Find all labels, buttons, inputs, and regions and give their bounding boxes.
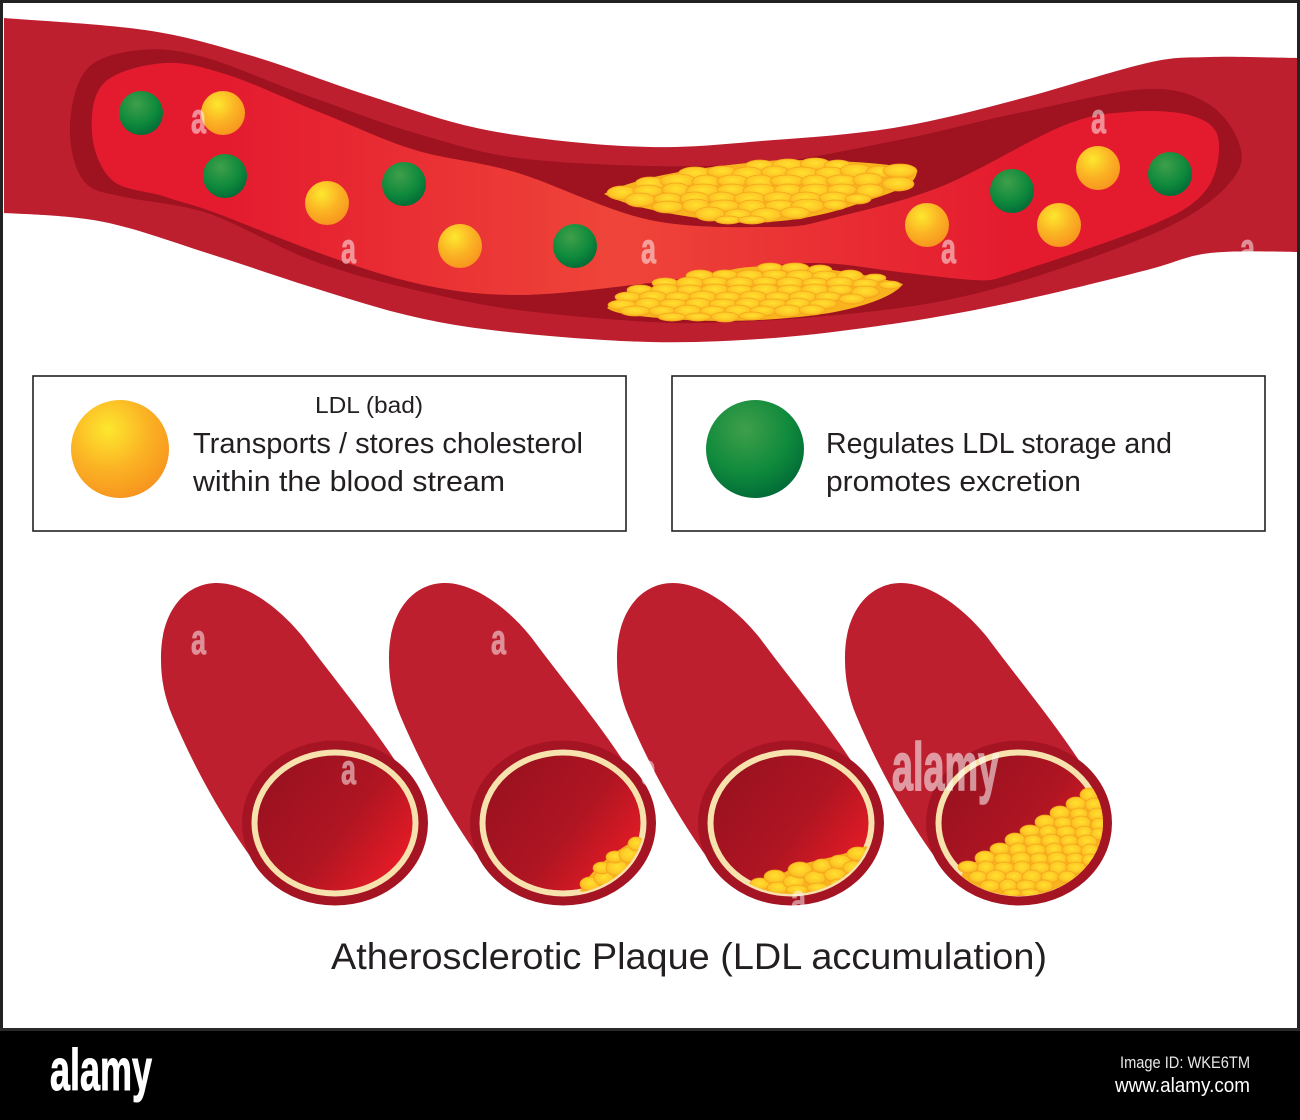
icon: LDL sphere — [71, 400, 169, 498]
watermark letters: a — [341, 225, 357, 273]
watermark letters: a — [791, 876, 807, 924]
watermark letters — [191, 95, 1256, 924]
artery outer wall — [4, 18, 1297, 342]
watermark word: alamy — [892, 729, 999, 805]
LDL description: within the blood stream — [192, 466, 505, 498]
bottom plaque deposit — [607, 263, 903, 322]
watermark letters: a — [191, 616, 207, 664]
image id: Image ID: WKE6TM — [1120, 1053, 1250, 1072]
cross-section vessel 4: large plaque — [845, 583, 1112, 906]
cross-section vessel 1: no plaque — [161, 583, 428, 906]
footer logo: alamy — [50, 1038, 152, 1103]
footer band — [0, 1028, 1300, 1120]
longitudinal artery — [4, 18, 1297, 342]
top plaque deposit — [604, 158, 917, 224]
caption: Atherosclerotic Plaque (LDL accumulation) — [331, 936, 1047, 977]
watermark letters: a — [341, 746, 357, 794]
legend: HDL — [672, 376, 1265, 531]
large plaque — [958, 788, 1103, 896]
watermark letters: a — [1240, 225, 1256, 273]
watermark letters: a — [1091, 95, 1107, 143]
LDL label: LDL (bad) — [315, 392, 423, 418]
legend: LDL — [33, 376, 626, 531]
watermark letters: a — [941, 225, 957, 273]
LDL description: Transports / stores cholesterol — [193, 428, 583, 460]
medium plaque — [750, 846, 868, 894]
icon: HDL sphere — [706, 400, 804, 498]
watermark letters: a — [641, 225, 657, 273]
HDL description: promotes excretion — [826, 466, 1081, 498]
artery inner wall — [70, 49, 1242, 323]
watermark letters: a — [191, 95, 207, 143]
artery lumen — [92, 63, 1219, 295]
small plaque — [580, 836, 642, 892]
cross-section vessel 2: small plaque — [389, 583, 656, 906]
website: www.alamy.com — [1114, 1075, 1250, 1097]
watermark letters: a — [491, 616, 507, 664]
watermark letters: a — [641, 746, 657, 794]
yellow LDL particles — [201, 91, 1120, 268]
HDL description: Regulates LDL storage and — [826, 428, 1172, 460]
cross-section vessel 3: medium plaque — [617, 583, 884, 906]
green HDL particles — [119, 91, 1192, 268]
